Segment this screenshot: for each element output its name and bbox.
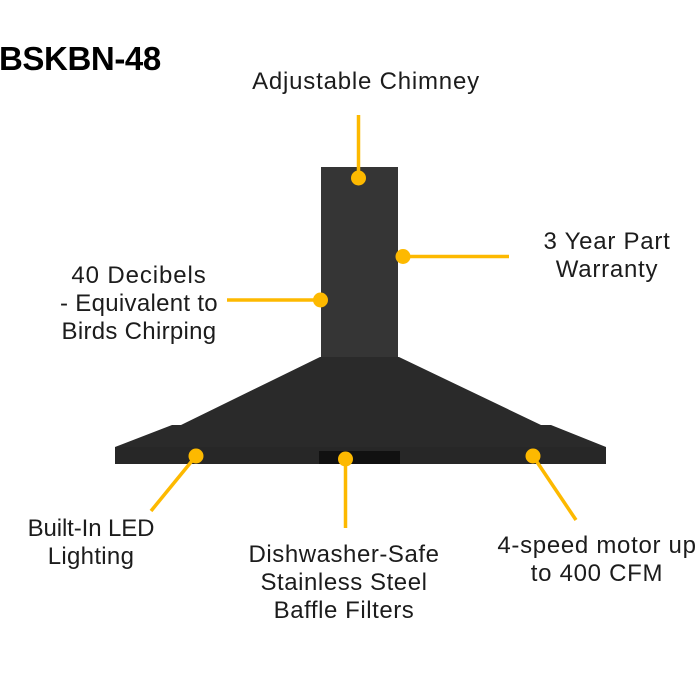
label: motor: to 400 CFM bbox=[531, 560, 663, 587]
label: decibels: 40 Decibels bbox=[71, 262, 207, 289]
callout: motor pointer bbox=[526, 448, 576, 520]
label: motor: 4-speed motor up bbox=[497, 532, 697, 559]
label: LED: Lighting bbox=[48, 543, 134, 570]
callout: decibels pointer bbox=[227, 292, 328, 308]
label: LED: Built-In LED bbox=[28, 515, 154, 542]
label: warranty bbox=[543, 228, 670, 283]
callout: chimney pointer bbox=[351, 115, 366, 186]
hood lower band bbox=[115, 447, 606, 464]
label: LED bbox=[28, 515, 154, 570]
callout: warranty pointer bbox=[396, 249, 509, 264]
label: decibels bbox=[60, 262, 218, 345]
label: warranty: Warranty bbox=[556, 256, 658, 283]
label: decibels: - Equivalent to bbox=[60, 290, 218, 317]
label: filters bbox=[248, 541, 440, 624]
label: filters: Baffle Filters bbox=[274, 597, 414, 624]
front panel bbox=[319, 451, 400, 464]
title: BSKBN-48 bbox=[0, 40, 161, 77]
hood canopy bbox=[115, 357, 606, 464]
chimney bbox=[321, 167, 398, 357]
label: decibels: Birds Chirping bbox=[62, 318, 216, 345]
label: warranty: 3 Year Part bbox=[543, 228, 670, 255]
label: chimney: Adjustable Chimney bbox=[252, 68, 480, 95]
callout: LED pointer bbox=[151, 448, 204, 511]
label: motor bbox=[497, 532, 697, 587]
label: filters: Dishwasher-Safe bbox=[248, 541, 440, 568]
callout: filters pointer bbox=[338, 452, 353, 528]
label: filters: Stainless Steel bbox=[260, 569, 428, 596]
